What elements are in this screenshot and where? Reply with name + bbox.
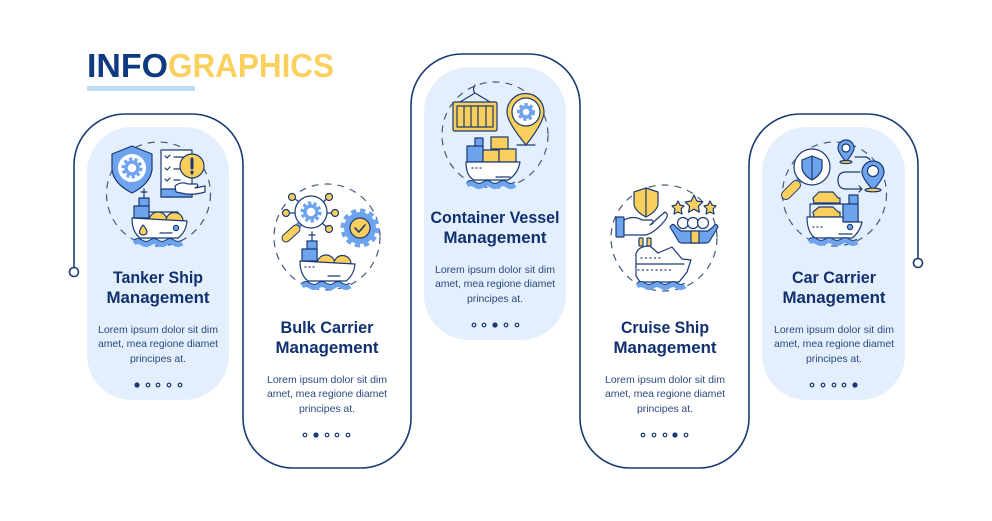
text block <box>605 374 725 415</box>
heading: Management <box>276 338 379 357</box>
text block: Lorem ipsum dolor sit dim <box>267 374 387 386</box>
heading: Container Vessel <box>430 208 560 227</box>
icon: cruise ship management <box>611 185 718 291</box>
pagination dots <box>641 433 688 437</box>
text block: Lorem ipsum dolor sit dim <box>774 324 894 336</box>
panel: car carrier background <box>762 127 905 400</box>
heading: Management <box>782 288 886 307</box>
text block: principes at. <box>299 403 355 415</box>
heading: Cruise Ship <box>621 318 709 337</box>
text block: principes at. <box>130 353 186 365</box>
text block: amet, mea regione diamet <box>98 338 218 350</box>
heading <box>614 318 717 357</box>
text block <box>774 324 894 365</box>
card: Cruise Ship Management <box>605 185 725 437</box>
text block <box>98 324 218 365</box>
title: INFO <box>87 47 168 84</box>
heading <box>106 268 210 307</box>
heading: Management <box>106 288 210 307</box>
text block: amet, mea regione diamet <box>267 388 387 400</box>
text block <box>435 264 555 305</box>
text block: Lorem ipsum dolor sit dim <box>605 374 725 386</box>
text block <box>267 374 387 415</box>
title: GRAPHICS <box>168 47 334 84</box>
pagination dots <box>472 323 519 327</box>
pagination dots <box>135 383 182 387</box>
icon: car carrier management <box>782 140 886 246</box>
heading: Management <box>444 228 547 247</box>
icon: bulk carrier management <box>274 184 380 290</box>
panel: tanker background <box>87 127 229 400</box>
text block: principes at. <box>637 403 693 415</box>
icon: container vessel management <box>442 82 548 188</box>
heading <box>430 208 560 247</box>
title <box>87 47 334 91</box>
pagination dots <box>810 383 857 387</box>
heading: Car Carrier <box>792 268 876 287</box>
text block: Lorem ipsum dolor sit dim <box>435 264 555 276</box>
card: Tanker Ship Management <box>98 142 218 387</box>
text block: amet, mea regione diamet <box>435 278 555 290</box>
connecting outline <box>70 54 922 468</box>
card: Bulk Carrier Management <box>267 184 387 437</box>
text block: principes at. <box>806 353 862 365</box>
heading: Tanker Ship <box>113 268 203 287</box>
pagination dots <box>303 433 350 437</box>
panel: container background <box>424 67 566 340</box>
text block: Lorem ipsum dolor sit dim <box>98 324 218 336</box>
card: Container Vessel Management <box>430 82 560 327</box>
text block: amet, mea regione diamet <box>605 388 725 400</box>
heading: Management <box>614 338 717 357</box>
heading: Bulk Carrier <box>280 318 374 337</box>
icon: tanker ship management <box>106 142 210 246</box>
heading <box>782 268 886 307</box>
heading <box>276 318 379 357</box>
text block: principes at. <box>467 293 523 305</box>
text block: amet, mea regione diamet <box>774 338 894 350</box>
card: Car Carrier Management <box>774 140 894 387</box>
